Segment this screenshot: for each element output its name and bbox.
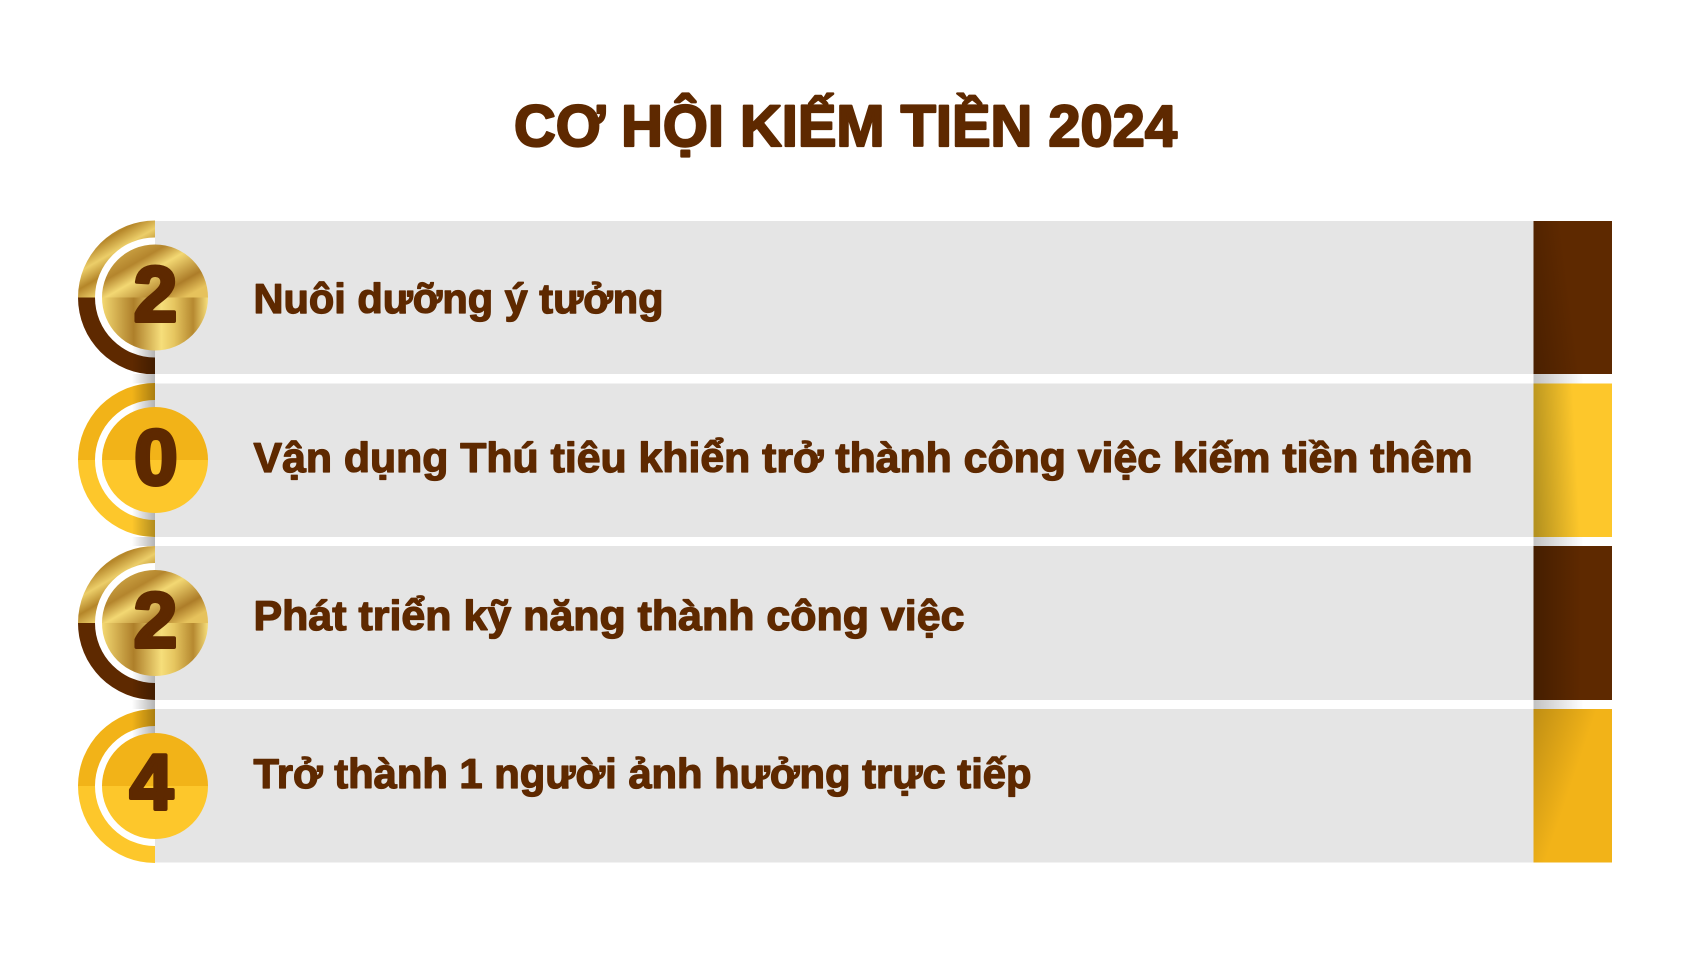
title: CƠ HỘI KIẾM TIỀN 2024 [514, 94, 1177, 159]
row 2 digit: 0 [134, 413, 178, 501]
row 1 bar [155, 221, 1534, 374]
row 1 coin [78, 220, 208, 374]
row 4 label: Trở thành 1 người ảnh hưởng trực tiếp [254, 750, 1032, 797]
row 2 coin [78, 383, 208, 537]
row 2 end cap [1534, 384, 1612, 537]
row 4 bar [155, 709, 1534, 862]
row 2 [78, 383, 1612, 537]
row 4 end cap [1534, 709, 1612, 862]
row 1 label: Nuôi dưỡng ý tưởng [254, 275, 664, 322]
row 1 end cap [1534, 221, 1612, 374]
row 4 [78, 709, 1612, 863]
row 2 label: Vận dụng Thú tiêu khiển trở thành công việc kiếm tiền thêm [254, 434, 1472, 481]
row 4 coin [78, 709, 208, 863]
row 3 digit: 2 [134, 576, 177, 664]
gap shadows [132, 374, 1584, 709]
row 3 [78, 546, 1612, 700]
row 4 digit: 4 [130, 738, 173, 826]
row 1 digit: 2 [134, 250, 177, 338]
row 2 bar [155, 384, 1534, 537]
row 3 coin [78, 546, 208, 700]
row 3 bar [155, 546, 1534, 700]
row 1 [78, 220, 1612, 374]
row 3 label: Phát triển kỹ năng thành công việc [254, 592, 964, 639]
row 3 end cap [1534, 546, 1612, 700]
